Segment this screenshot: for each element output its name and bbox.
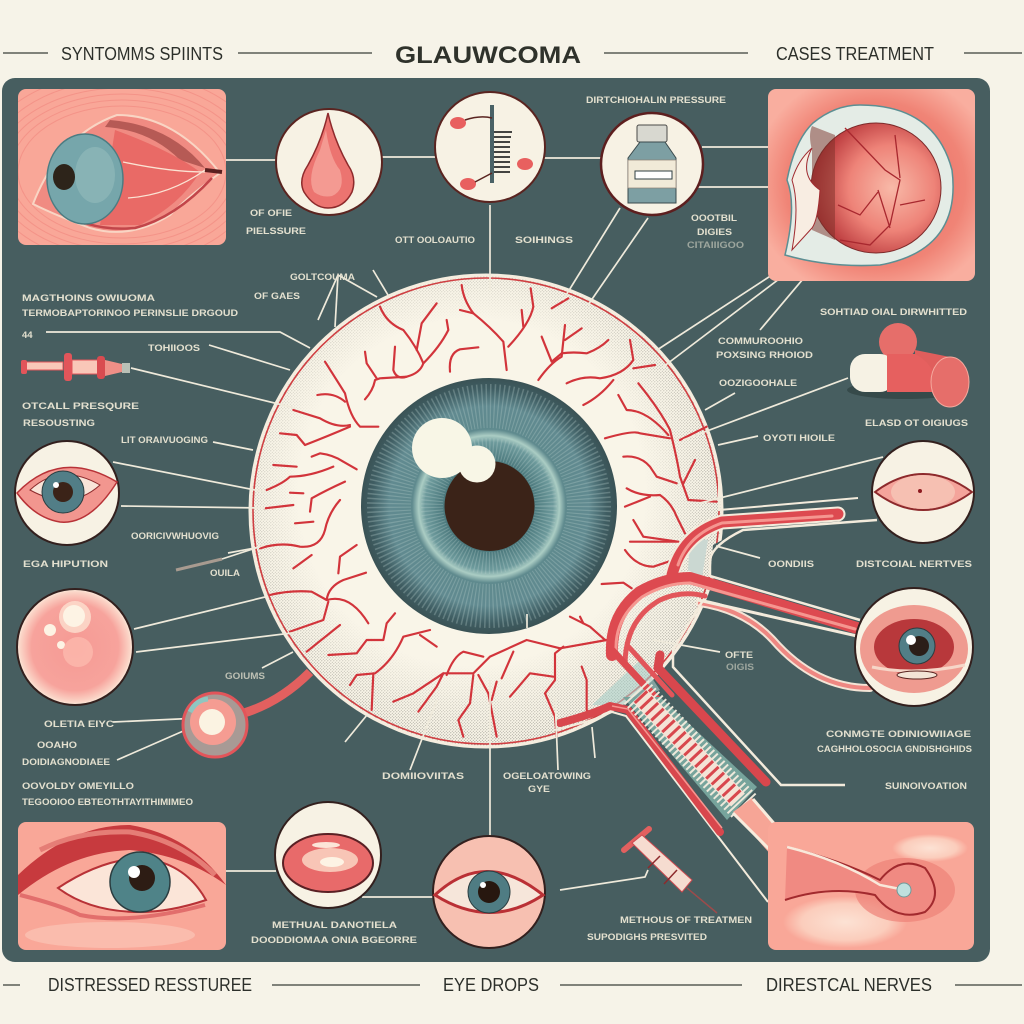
text labels: CAGHHOLOSOCIA GNDISHGHIDS <box>817 744 972 755</box>
icon: lens with tube <box>183 672 310 757</box>
teal tint near tube <box>592 660 660 705</box>
text labels: DOMIIOVIITAS <box>382 771 464 782</box>
text labels: OUILA <box>210 568 240 579</box>
icon: pills <box>847 323 969 407</box>
icon: pink lens circle <box>17 589 133 705</box>
text labels: GOIUMS <box>225 671 265 682</box>
text labels: MAGTHOINS OWIUOMA <box>22 293 155 304</box>
icon: blood drop <box>276 109 382 215</box>
text labels: OIGIS <box>726 662 754 673</box>
panel: top right retina <box>768 89 975 281</box>
text labels: DIGIES <box>697 227 732 238</box>
text labels: DOODDIOMAA ONIA BGEORRE <box>251 935 417 946</box>
text labels: OYOTI HIOILE <box>763 433 835 444</box>
text labels: PIELSSURE <box>246 226 306 237</box>
text labels: OTCALL PRESQURE <box>22 401 139 412</box>
icon: small needle <box>176 545 265 570</box>
header <box>3 42 1022 69</box>
sclera <box>250 275 722 747</box>
text labels: OORICIVWHUOVIG <box>131 531 219 542</box>
footer: eye drops: EYE DROPS <box>443 975 539 995</box>
text labels: DISTCOIAL NERTVES <box>856 559 972 570</box>
text labels: TERMOBAPTORINOO PERINSLIE DRGOUD <box>22 308 238 319</box>
heading: symptoms: SYNTOMMS SPIINTS <box>61 44 223 64</box>
text labels: SUPODIGHS PRESVITED <box>587 932 707 943</box>
text labels: OOZIGOOHALE <box>719 378 797 389</box>
optic nerve and tube <box>555 480 877 902</box>
highlights <box>412 418 472 478</box>
footer: nerves: DIRESTCAL NERVES <box>766 975 932 995</box>
footer <box>3 975 1022 995</box>
text labels: RESOUSTING <box>23 418 95 429</box>
text labels: CONMGTE ODINIOWIIAGE <box>826 729 971 740</box>
text labels: DOIDIAGNODIAEE <box>22 757 110 768</box>
text labels: TOHIIOOS <box>148 343 200 354</box>
tube walls <box>612 650 660 702</box>
loop vessel <box>700 603 870 688</box>
icon: right eye circle 2 <box>855 588 973 706</box>
text labels: OOOTBIL <box>691 213 737 224</box>
icon: left small eye <box>15 441 119 545</box>
text labels: OFTE <box>725 650 753 661</box>
upper nerve branch <box>672 514 838 575</box>
text labels: OONDIIS <box>768 559 814 570</box>
panel: top left eye <box>18 89 226 245</box>
text labels: GYE <box>528 784 550 795</box>
notch between nerve branches <box>710 527 790 600</box>
text labels: SOHTIAD OIAL DIRWHITTED <box>820 307 967 318</box>
text labels: OGELOATOWING <box>503 771 591 782</box>
text labels: METHOUS OF TREATMEN <box>620 915 752 926</box>
text labels: OLETIA EIYC <box>44 719 114 730</box>
text labels: 44 <box>22 330 33 341</box>
icon: bottom eye circle <box>433 836 545 948</box>
icon: drainage diagram <box>435 92 545 202</box>
text labels: LIT ORAIVUOGING <box>121 435 208 446</box>
text labels: POXSING RHOIOD <box>716 350 813 361</box>
pupil <box>444 461 534 551</box>
text labels: CITAIIIGOO <box>687 240 744 251</box>
leader lines <box>46 147 883 897</box>
heading: treatment: CASES TREATMENT <box>776 44 934 64</box>
icon: right eye circle 1 <box>872 441 974 543</box>
panel: bottom left eye <box>18 822 226 950</box>
panel: bottom right eye <box>768 822 974 950</box>
text labels: TEGOOIOO EBTEOTHTAYITHIMIMEO <box>22 797 193 808</box>
text labels: EGA HIPUTION <box>23 559 108 570</box>
icon: medicine bottle <box>601 113 703 215</box>
text labels: SUINOIVOATION <box>885 781 967 792</box>
icon: bottom syringe <box>624 829 717 913</box>
text labels: SOIHINGS <box>515 235 573 246</box>
title: GLAUWCOMA <box>395 42 581 69</box>
lower nerve trunk <box>698 600 857 636</box>
text labels: OOVOLDY OMEYILLO <box>22 781 134 792</box>
text labels: GOLTCOUMA <box>290 272 355 283</box>
icon: lens capsule <box>275 802 381 908</box>
text labels: OTT OOLOAUTIO <box>395 235 475 246</box>
text labels: OOAHO <box>37 740 77 751</box>
text labels: METHUAL DANOTIELA <box>272 920 397 931</box>
icon: syringe <box>21 353 130 381</box>
text labels: OF GAES <box>254 291 300 302</box>
text labels <box>22 95 972 946</box>
iris <box>361 378 617 634</box>
text labels: ELASD OT OIGIUGS <box>865 418 968 429</box>
text labels: OF OFIE <box>250 208 292 219</box>
ribbed tube section <box>623 697 757 820</box>
text labels: DIRTCHIOHALIN PRESSURE <box>586 95 726 106</box>
pink stub <box>733 798 795 856</box>
red veins <box>260 285 717 737</box>
footer: distressed pressure: DISTRESSED RESSTUREE <box>48 975 252 995</box>
central eyeball <box>250 275 722 747</box>
text labels: COMMUROOHIO <box>718 336 803 347</box>
